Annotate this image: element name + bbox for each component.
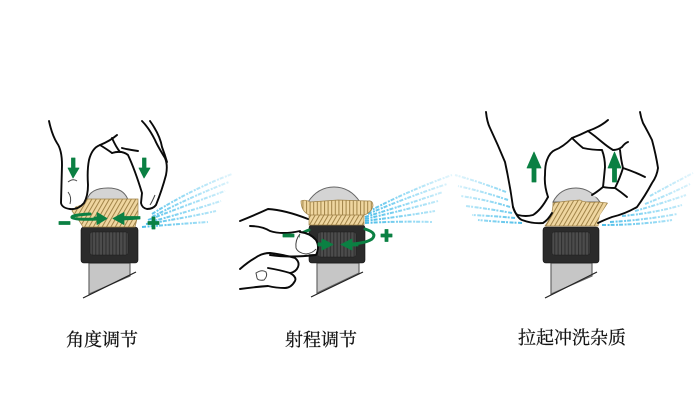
label: angle adjustment: 角度调节 — [66, 330, 138, 350]
down arrow left — [68, 158, 79, 178]
sprinkler body — [72, 188, 138, 298]
label: pull up to flush debris: 拉起冲洗杂质 — [518, 328, 626, 348]
rotation arrow — [72, 212, 140, 224]
minus sign — [59, 222, 70, 224]
minus sign — [283, 234, 294, 237]
rotation arrow heads — [318, 239, 358, 250]
water spray — [365, 175, 452, 223]
sprinkler body — [543, 188, 608, 298]
up arrow right — [608, 152, 621, 182]
plus sign — [148, 217, 159, 229]
hand turning the body — [240, 209, 318, 289]
hand pressing the cap — [49, 121, 167, 209]
water spray — [142, 174, 232, 227]
down arrow right — [139, 158, 150, 178]
water spray right — [602, 173, 693, 225]
plus sign — [381, 230, 392, 242]
sprinkler body — [301, 187, 373, 297]
rotation arrow back — [301, 229, 374, 244]
panel: pull up to flush debris — [455, 112, 693, 348]
panel: angle adjustment — [49, 121, 232, 350]
label: range adjustment: 射程调节 — [285, 330, 357, 350]
water spray left — [455, 175, 522, 223]
up arrow left — [527, 152, 541, 182]
hand pulling the cap — [486, 112, 658, 223]
panel: range adjustment — [240, 175, 452, 350]
